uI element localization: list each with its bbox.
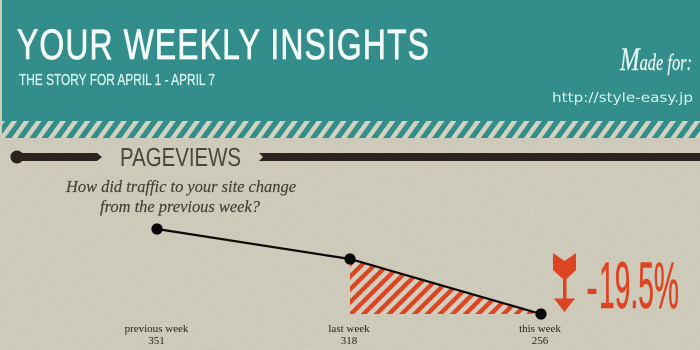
data points xyxy=(151,223,547,320)
axis labels: 318 xyxy=(341,335,358,347)
question text: from the previous week? xyxy=(100,197,260,216)
header banner xyxy=(2,0,700,121)
percent change xyxy=(586,248,679,323)
axis labels: this week xyxy=(519,323,561,335)
axis labels: last week xyxy=(328,323,370,335)
question text xyxy=(65,177,296,216)
hatched decline area xyxy=(350,259,541,314)
trend line xyxy=(157,229,541,314)
section heading: pageviews: PAGEVIEWS xyxy=(120,142,241,172)
striped band xyxy=(2,121,700,138)
line chart xyxy=(125,223,561,347)
title: YOUR WEEKLY INSIGHTS xyxy=(17,21,430,69)
section divider: left pin xyxy=(10,150,102,164)
icon: down arrow xyxy=(553,253,576,312)
axis labels: previous week xyxy=(125,323,189,335)
axis labels xyxy=(125,323,561,347)
question text: How did traffic to your site change xyxy=(65,177,296,196)
percent change: - xyxy=(586,249,598,323)
section divider: right bar xyxy=(259,153,700,161)
axis labels: 351 xyxy=(148,335,165,347)
site url: http://style-easy.jp xyxy=(552,90,693,106)
subtitle: THE STORY FOR APRIL 1 - APRIL 7 xyxy=(19,72,215,89)
axis labels: 256 xyxy=(532,335,549,347)
